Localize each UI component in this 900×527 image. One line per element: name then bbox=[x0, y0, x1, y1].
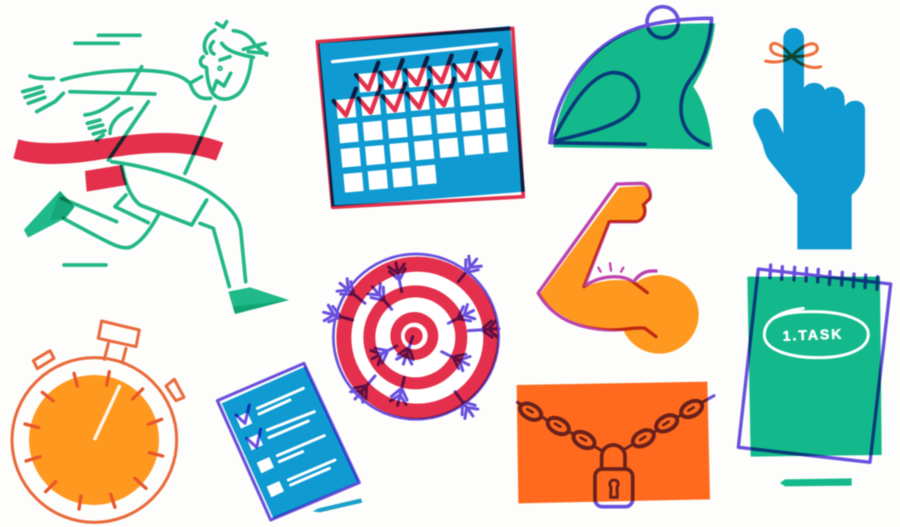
calendar offset frame and check marks bbox=[317, 28, 523, 207]
target rings bbox=[336, 257, 498, 419]
checklist sheet bbox=[222, 367, 358, 518]
checklist frame and check marks bbox=[217, 363, 359, 520]
task label text: 1.TASK bbox=[782, 326, 844, 344]
notebook underline bbox=[780, 478, 852, 486]
arm outline bbox=[538, 183, 656, 337]
illustration: padlocked envelope bbox=[517, 382, 714, 507]
string bow bbox=[766, 43, 821, 68]
frog outline bbox=[550, 7, 712, 145]
notebook page bbox=[747, 277, 882, 457]
finish ribbon bbox=[13, 133, 223, 192]
calendar title line bbox=[333, 44, 497, 62]
checklist boxes bbox=[236, 412, 284, 497]
stopwatch tick marks bbox=[25, 372, 163, 509]
illustration: finger with string reminder bbox=[753, 28, 865, 249]
illustration: stopwatch bbox=[12, 321, 184, 522]
illustration: calendar bbox=[317, 26, 525, 207]
illustration: task notebook bbox=[738, 265, 891, 486]
target outline and arrows bbox=[322, 254, 500, 421]
stopwatch case, crown and buttons bbox=[12, 321, 184, 522]
illustration: runner crossing finish line bbox=[13, 22, 289, 314]
calendar day squares bbox=[336, 60, 508, 193]
stopwatch face bbox=[29, 375, 159, 505]
illustration: frog bbox=[550, 7, 715, 149]
calendar sheet bbox=[318, 26, 525, 207]
hand bbox=[753, 28, 865, 249]
illustration: checklist bbox=[217, 363, 362, 520]
stopwatch hand bbox=[94, 385, 120, 440]
checklist underline bbox=[313, 498, 362, 512]
illustration: flexed arm bbox=[538, 183, 699, 354]
task label oval bbox=[764, 308, 868, 358]
illustration: target with arrows bbox=[322, 254, 500, 421]
runner shoes bbox=[25, 192, 289, 314]
frog body bbox=[553, 23, 715, 149]
chain and padlock bbox=[517, 396, 714, 507]
notebook frame and spiral bbox=[738, 265, 891, 462]
checklist text lines bbox=[257, 388, 335, 485]
runner line drawing bbox=[23, 22, 267, 287]
arm fill bbox=[540, 186, 699, 354]
envelope bbox=[517, 382, 710, 503]
